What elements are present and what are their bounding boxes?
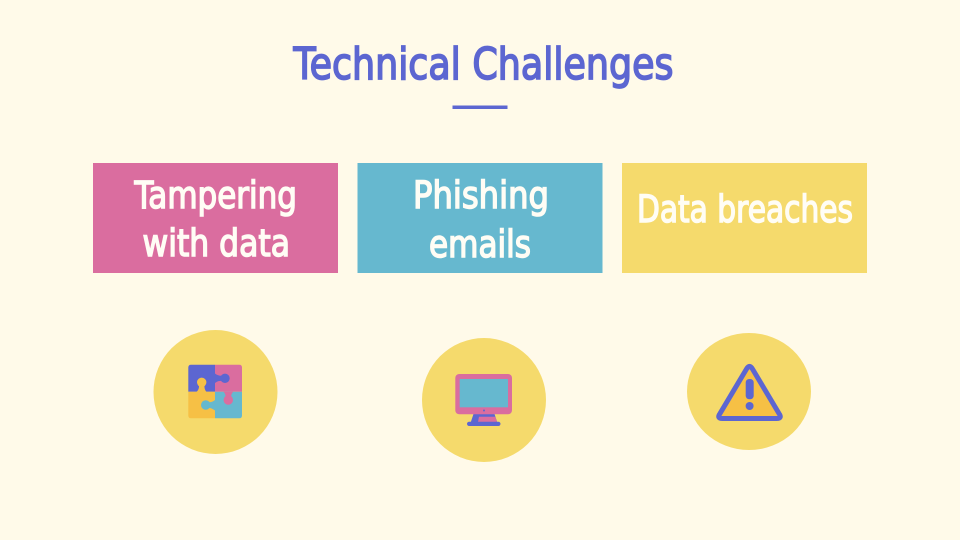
label: phishing emails (413, 174, 549, 266)
puzzle tab: orange (196, 378, 206, 392)
icon: puzzle (154, 330, 278, 454)
icon: monitor (422, 338, 546, 462)
icon: warning (687, 333, 811, 450)
label: tampering with data: with data (142, 222, 290, 265)
puzzle tab: pink (224, 392, 233, 405)
label: phishing emails: Phishing (413, 174, 549, 217)
monitor stand (470, 414, 498, 423)
monitor screen (460, 379, 508, 407)
panel: data breaches (622, 163, 867, 273)
label: phishing emails: emails (429, 223, 531, 266)
puzzle piece: teal (215, 392, 242, 418)
monitor stand highlight (478, 417, 497, 422)
panel: phishing emails (358, 163, 602, 273)
puzzle piece: orange (188, 392, 215, 418)
warning triangle (719, 366, 780, 418)
title underline (452, 106, 508, 109)
monitor base (467, 422, 500, 426)
exclamation bar (746, 379, 754, 399)
label: data breaches: Data breaches (637, 188, 853, 231)
puzzle tab: indigo (215, 374, 230, 383)
title: Technical Challenges (293, 39, 674, 90)
label: tampering with data (134, 174, 297, 265)
puzzle piece: pink (215, 365, 242, 392)
puzzle tab: teal (201, 400, 215, 410)
exclamation dot (746, 402, 754, 410)
monitor power dot (483, 410, 485, 412)
panel: tampering with data (93, 163, 338, 273)
label: tampering with data: Tampering (134, 174, 297, 217)
puzzle piece: indigo (188, 365, 215, 392)
monitor frame (455, 374, 512, 414)
